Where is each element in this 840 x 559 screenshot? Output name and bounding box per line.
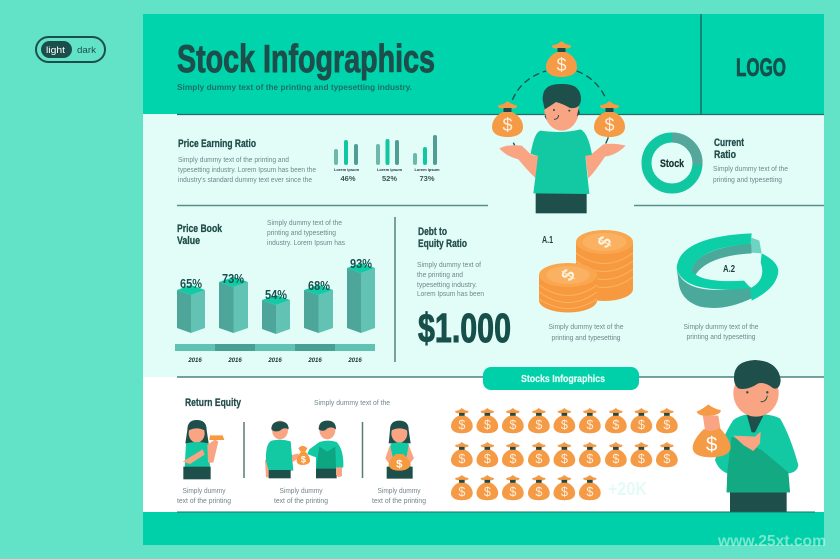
pictogram: money bag grid: $ — [586, 485, 593, 499]
bar chart: 52% — [382, 174, 397, 183]
captions: return equity: Simply dummy — [182, 488, 226, 495]
theme toggle: light — [46, 45, 66, 55]
bar chart — [334, 137, 440, 183]
captions: return equity: text of the printing — [177, 498, 231, 505]
pictogram: money bag grid: $ — [458, 485, 465, 499]
illustration: woman holding money bag: $ — [396, 459, 403, 471]
panel: price earning ratio — [178, 137, 440, 184]
A.2 caption: Simply dummy text of the — [684, 324, 759, 331]
large stack: $ — [593, 233, 616, 251]
pictogram: money bag grid: $ — [509, 418, 516, 432]
pictogram: money bag grid: $ — [484, 452, 491, 466]
year strip: 2016 — [307, 358, 322, 364]
watermark: www.25xt.com — [717, 533, 826, 550]
pants — [536, 192, 587, 213]
A.2 caption — [684, 324, 759, 341]
panel: price book value — [175, 220, 375, 364]
panel: debt to equity ratio: Simply dummy text of — [417, 262, 481, 269]
pants — [730, 490, 787, 512]
pictogram: money bag grid: $ — [586, 452, 593, 466]
icon: money bag left: $ — [502, 115, 513, 135]
captions: return equity: text of the printing — [372, 498, 426, 505]
pictogram: money bag grid: $ — [586, 418, 593, 432]
year strip — [175, 344, 375, 364]
pictogram: money bag grid: $ — [663, 418, 670, 432]
shirt — [531, 129, 592, 194]
panel: debt to equity ratio: the printing and — [417, 272, 463, 279]
pictogram: money bag grid: $ — [484, 418, 491, 432]
stocks infographics pill: Stocks Infographics — [521, 373, 605, 385]
right man — [307, 421, 343, 478]
bar chart: Lorem ipsum — [334, 167, 359, 172]
return equity description: Simply dummy text of the — [314, 400, 390, 407]
pictogram: money bag grid: $ — [663, 452, 670, 466]
label A.2: A.2 — [723, 264, 735, 275]
heading: Price Book — [177, 223, 223, 235]
description: printing and typesetting — [267, 230, 336, 237]
head — [733, 360, 781, 417]
panel: debt to equity ratio: Equity Ratio — [418, 238, 467, 250]
illustration: man juggling money bags — [499, 71, 626, 213]
description: Simply dummy text of the — [267, 220, 342, 227]
bar chart: Lorem ipsum — [414, 167, 440, 172]
3d bar chart: 54% — [265, 287, 287, 302]
pictogram: money bag grid: $ — [535, 485, 542, 499]
pictogram: money bag grid: $ — [561, 452, 568, 466]
bar chart: 46% — [340, 174, 356, 183]
year strip: 2016 — [227, 358, 242, 364]
heading — [177, 223, 223, 247]
big number: $1.000 — [418, 305, 511, 351]
icon: money bag right — [594, 101, 625, 137]
pictogram: money bag grid: $ — [509, 452, 516, 466]
donut chart: stock — [646, 138, 698, 188]
captions: return equity: text of the printing — [274, 498, 328, 505]
pictogram: money bag grid: $ — [561, 485, 568, 499]
captions: return equity — [177, 488, 426, 505]
body text — [178, 157, 316, 184]
money bag with hand — [693, 404, 731, 457]
panel: debt to equity ratio: Debt to — [418, 226, 447, 238]
body text: industry's standard dummy text ever since the — [178, 177, 312, 184]
3d bar chart: 73% — [222, 271, 244, 286]
small stack: $ — [557, 266, 579, 284]
year strip: 2016 — [267, 358, 282, 364]
3d bar chart — [177, 256, 375, 334]
money bag with hand: $ — [706, 433, 718, 456]
A.1 caption: Simply dummy text of the — [548, 324, 624, 331]
current ratio text: Ratio — [714, 149, 736, 161]
heading: Price Earning Ratio — [178, 138, 256, 150]
panel: debt to equity ratio — [417, 226, 511, 351]
A.1 caption: printing and typesetting — [552, 335, 621, 342]
pictogram: money bag grid: $ — [484, 485, 491, 499]
collar and tie — [747, 414, 764, 432]
theme toggle — [36, 37, 105, 62]
pictogram: money bag grid — [451, 408, 678, 500]
faint +20K label: +20K — [608, 479, 647, 499]
icon: coin stacks — [539, 230, 633, 312]
icon: money bag left — [492, 101, 523, 137]
body text: typesetting industry. Lorem Ipsum has been the — [178, 167, 316, 174]
icon: money bag top: $ — [556, 55, 567, 75]
jacket — [715, 414, 798, 492]
description: industry. Lorem Ipsum has — [267, 240, 345, 247]
panel: debt to equity ratio: typesetting industry. — [417, 282, 477, 289]
hand pointing — [733, 432, 761, 451]
year strip: 2016 — [347, 358, 362, 364]
current ratio text — [713, 137, 788, 184]
captions: return equity: Simply dummy — [378, 488, 421, 495]
description — [267, 220, 345, 247]
label A.1: A.1 — [542, 235, 553, 246]
illustration: woman with gold bar — [183, 420, 224, 479]
illustration: two men exchanging money bag — [265, 421, 343, 478]
year strip: 2016 — [187, 358, 202, 364]
bar chart: Lorem ipsum — [377, 167, 402, 172]
pictogram: money bag grid: $ — [458, 418, 465, 432]
money bag: $ — [301, 454, 306, 464]
A.2 caption: printing and typesetting — [686, 334, 756, 341]
pictogram: money bag grid: $ — [535, 418, 542, 432]
current ratio text: Current — [714, 137, 744, 149]
pictogram: money bag grid: $ — [561, 418, 568, 432]
jacket front panel — [727, 437, 790, 492]
captions: return equity: Simply dummy — [280, 488, 323, 495]
icon: money bag right: $ — [604, 115, 615, 135]
illustration: man presenting money bag — [693, 360, 798, 512]
heading: Value — [177, 235, 200, 247]
pictogram: money bag grid: $ — [509, 485, 516, 499]
theme toggle: dark — [77, 45, 97, 55]
icon: money bag top — [546, 41, 577, 77]
subtitle: Simply dummy text of the printing and typesetting industry. — [177, 82, 412, 92]
current ratio text: Simply dummy text of the — [713, 166, 788, 173]
panel: debt to equity ratio: Lorem Ipsum has been — [417, 291, 484, 298]
logo: LOGO — [736, 54, 786, 82]
heading: return equity: Return Equity — [185, 397, 242, 409]
pictogram: money bag grid: $ — [612, 418, 619, 432]
pictogram: money bag grid: $ — [638, 418, 645, 432]
icon: 3d ring chart — [677, 233, 778, 308]
arc of motion — [512, 71, 608, 153]
pictogram: money bag grid: $ — [535, 452, 542, 466]
3d bar chart: 68% — [308, 278, 330, 293]
A.1 caption — [548, 324, 624, 342]
title: Stock Infographics — [177, 38, 435, 81]
3d bar chart: 93% — [350, 256, 372, 271]
bar chart: 73% — [419, 174, 435, 183]
pictogram: money bag grid: $ — [612, 452, 619, 466]
body text: Simply dummy text of the printing and — [178, 157, 289, 164]
panel: infographic sheet — [143, 14, 824, 545]
illustration: woman holding money bag — [385, 421, 414, 479]
pictogram: money bag grid: $ — [458, 452, 465, 466]
pictogram: money bag grid: $ — [638, 452, 645, 466]
left man — [265, 421, 299, 478]
stocks infographics pill — [483, 367, 639, 390]
head — [543, 84, 581, 131]
donut chart: stock: Stock — [660, 158, 685, 170]
3d bar chart: 65% — [180, 276, 202, 291]
arms — [499, 144, 626, 178]
current ratio text: printing and typesetting — [713, 177, 782, 184]
